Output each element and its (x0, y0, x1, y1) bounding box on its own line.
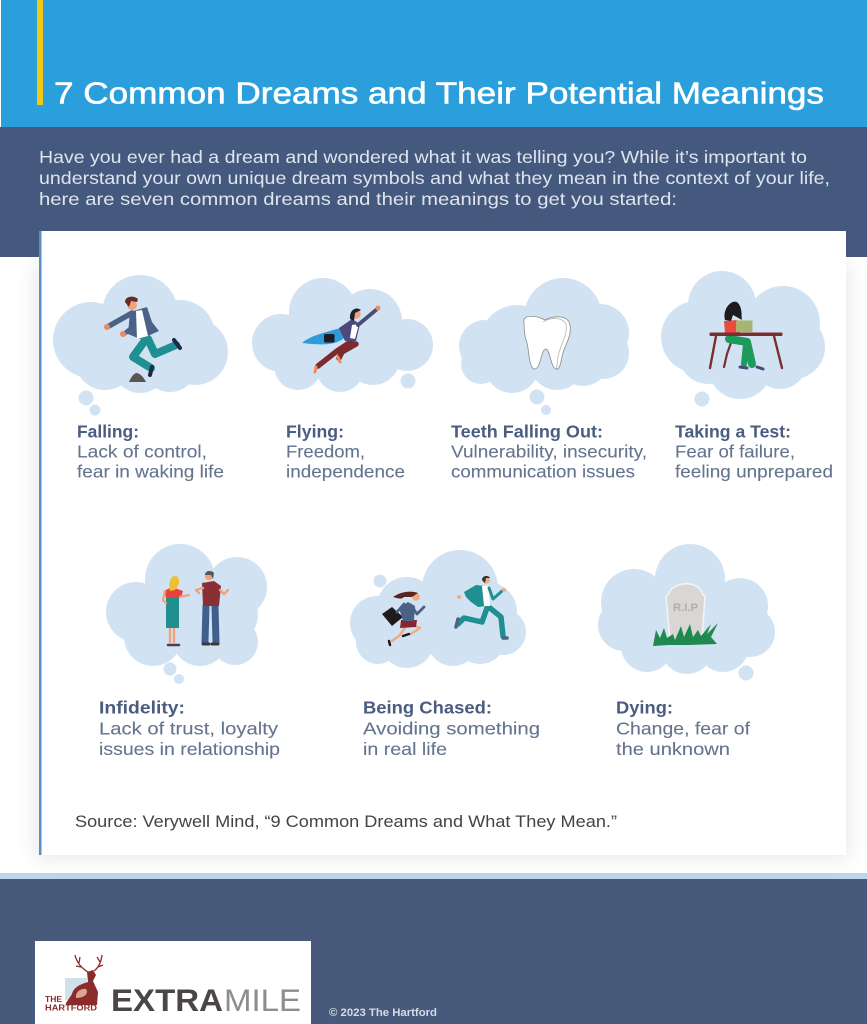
logo wordmark: EXTRA (111, 982, 223, 1018)
label: chased: Being Chased: (363, 698, 492, 718)
label: dying: the unknown (616, 739, 730, 759)
icon: stag: THE (45, 995, 63, 1004)
title: 7 Common Dreams and Their Potential Meanings (54, 76, 824, 110)
intro text: Have you ever had a dream and wondered what it was telling you? While it’s important to (39, 147, 807, 167)
icon: running woman and man (382, 576, 507, 645)
copyright: © 2023 The Hartford (329, 1007, 437, 1019)
logo wordmark (111, 982, 301, 1018)
icon: stag (45, 955, 103, 1012)
label: flying: Flying: (286, 422, 344, 442)
intro band (0, 127, 867, 257)
cloud: falling (53, 275, 228, 416)
label: teeth: Teeth Falling Out: (451, 422, 603, 442)
card left edge (39, 231, 42, 855)
label: test: Taking a Test: (675, 422, 791, 442)
label: flying: Freedom, (286, 442, 365, 462)
icon: tombstone: R.I.P (673, 602, 698, 614)
panel: flying (252, 278, 433, 482)
label: teeth: communication issues (451, 462, 635, 482)
label: teeth: Vulnerability, insecurity, (451, 442, 647, 462)
label: flying (286, 422, 405, 482)
label: test (675, 422, 833, 482)
header band (1, 0, 867, 127)
label: infidelity: issues in relationship (99, 739, 280, 759)
label: teeth (451, 422, 647, 482)
intro text: understand your own unique dream symbols and what they mean in the context of your life, (39, 168, 830, 188)
label: test: Fear of failure, (675, 442, 795, 462)
card shadow (34, 262, 850, 860)
yellow accent bar (37, 0, 43, 105)
label: dying: Change, fear of (616, 718, 750, 738)
cloud: flying (252, 278, 433, 392)
footer band (0, 879, 867, 1024)
panel: teeth (451, 278, 647, 482)
label: dying (616, 698, 750, 759)
logo panel (35, 941, 311, 1024)
label: test: feeling unprepared (675, 462, 833, 482)
panel: chased (350, 550, 540, 759)
label: chased: Avoiding something (363, 718, 540, 738)
icon: tooth (524, 316, 570, 369)
panel: dying (598, 544, 775, 759)
label: infidelity: Lack of trust, loyalty (99, 718, 278, 738)
label: chased (363, 698, 540, 759)
main card (40, 231, 846, 855)
label: chased: in real life (363, 739, 447, 759)
label: infidelity (99, 698, 280, 759)
label: falling: fear in waking life (77, 462, 224, 482)
footer accent strip (0, 873, 867, 879)
icon: stag: HARTFORD (45, 1004, 97, 1012)
label: infidelity: Infidelity: (99, 698, 185, 718)
label: falling: Falling: (77, 422, 139, 442)
cloud: test (661, 271, 825, 406)
icon: arguing couple (163, 571, 228, 645)
intro text: here are seven common dreams and their meanings to get you started: (39, 189, 677, 209)
label: dying: Dying: (616, 698, 673, 718)
logo wordmark: MILE (224, 982, 301, 1018)
label: falling (77, 422, 224, 482)
panel: infidelity (99, 544, 280, 759)
icon: falling man (104, 297, 180, 382)
cloud: infidelity (106, 544, 267, 684)
source note: Source: Verywell Mind, “9 Common Dreams and What They Mean.” (75, 812, 617, 831)
cloud: dying (598, 544, 775, 680)
icon: tombstone (653, 584, 718, 646)
icon: woman at desk (710, 302, 782, 369)
cloud: teeth (459, 278, 629, 415)
icon: flying woman (302, 306, 380, 372)
label: falling: Lack of control, (77, 442, 207, 462)
intro text (39, 147, 830, 209)
panel: falling (53, 275, 228, 482)
label: flying: independence (286, 462, 405, 482)
panel: test (661, 271, 833, 482)
cloud: chased (350, 550, 526, 668)
